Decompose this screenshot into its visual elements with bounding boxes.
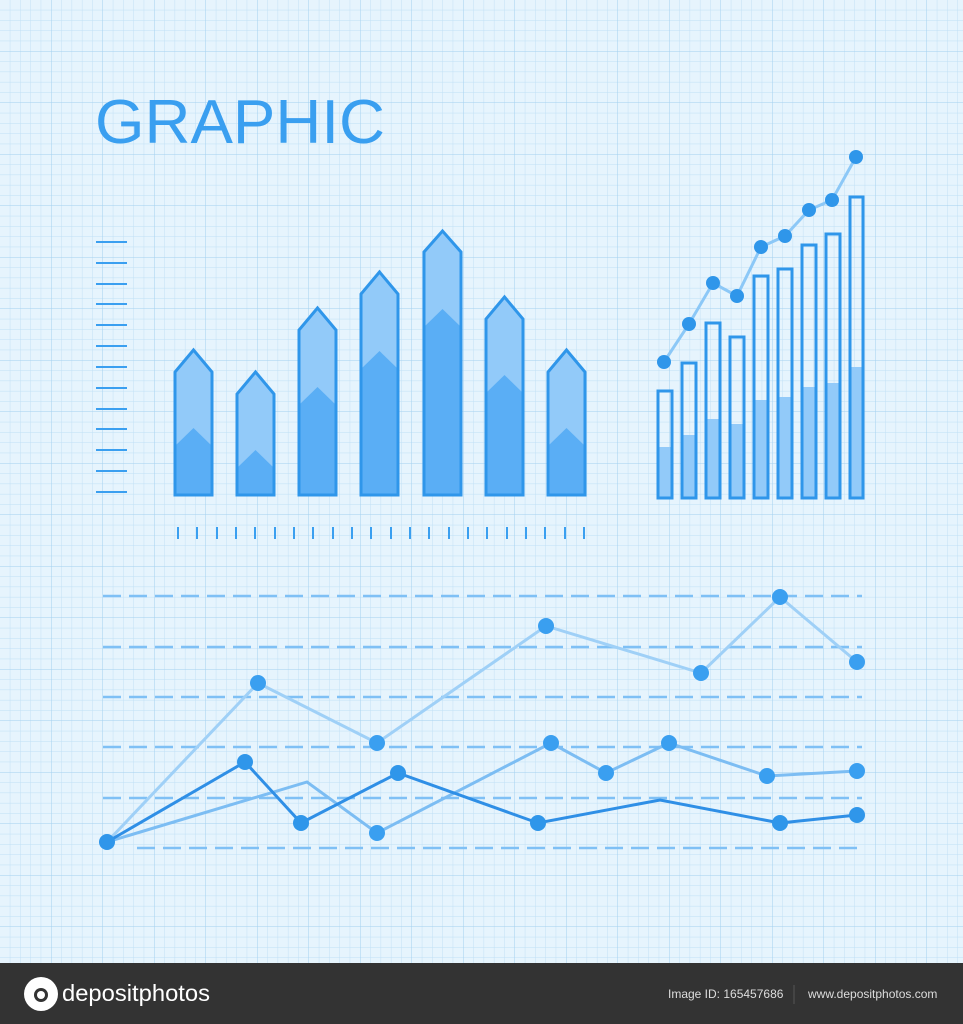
right bar chart with trend line bbox=[657, 150, 863, 499]
footer bar: Image ID: 165457686 bbox=[668, 987, 784, 1001]
series medium bbox=[107, 735, 865, 842]
footer bar bbox=[0, 963, 963, 1024]
footer bar: www.depositphotos.com bbox=[807, 987, 937, 1001]
series dark bbox=[99, 754, 865, 850]
icon: camera logo bbox=[24, 977, 58, 1011]
bottom tick scale bbox=[178, 527, 584, 539]
arrow bar chart bbox=[175, 231, 585, 495]
series light bbox=[107, 589, 865, 842]
footer bar: depositphotos bbox=[62, 980, 210, 1006]
left tick scale bbox=[96, 242, 127, 492]
line chart bbox=[99, 589, 865, 850]
title: GRAPHIC bbox=[95, 88, 385, 157]
